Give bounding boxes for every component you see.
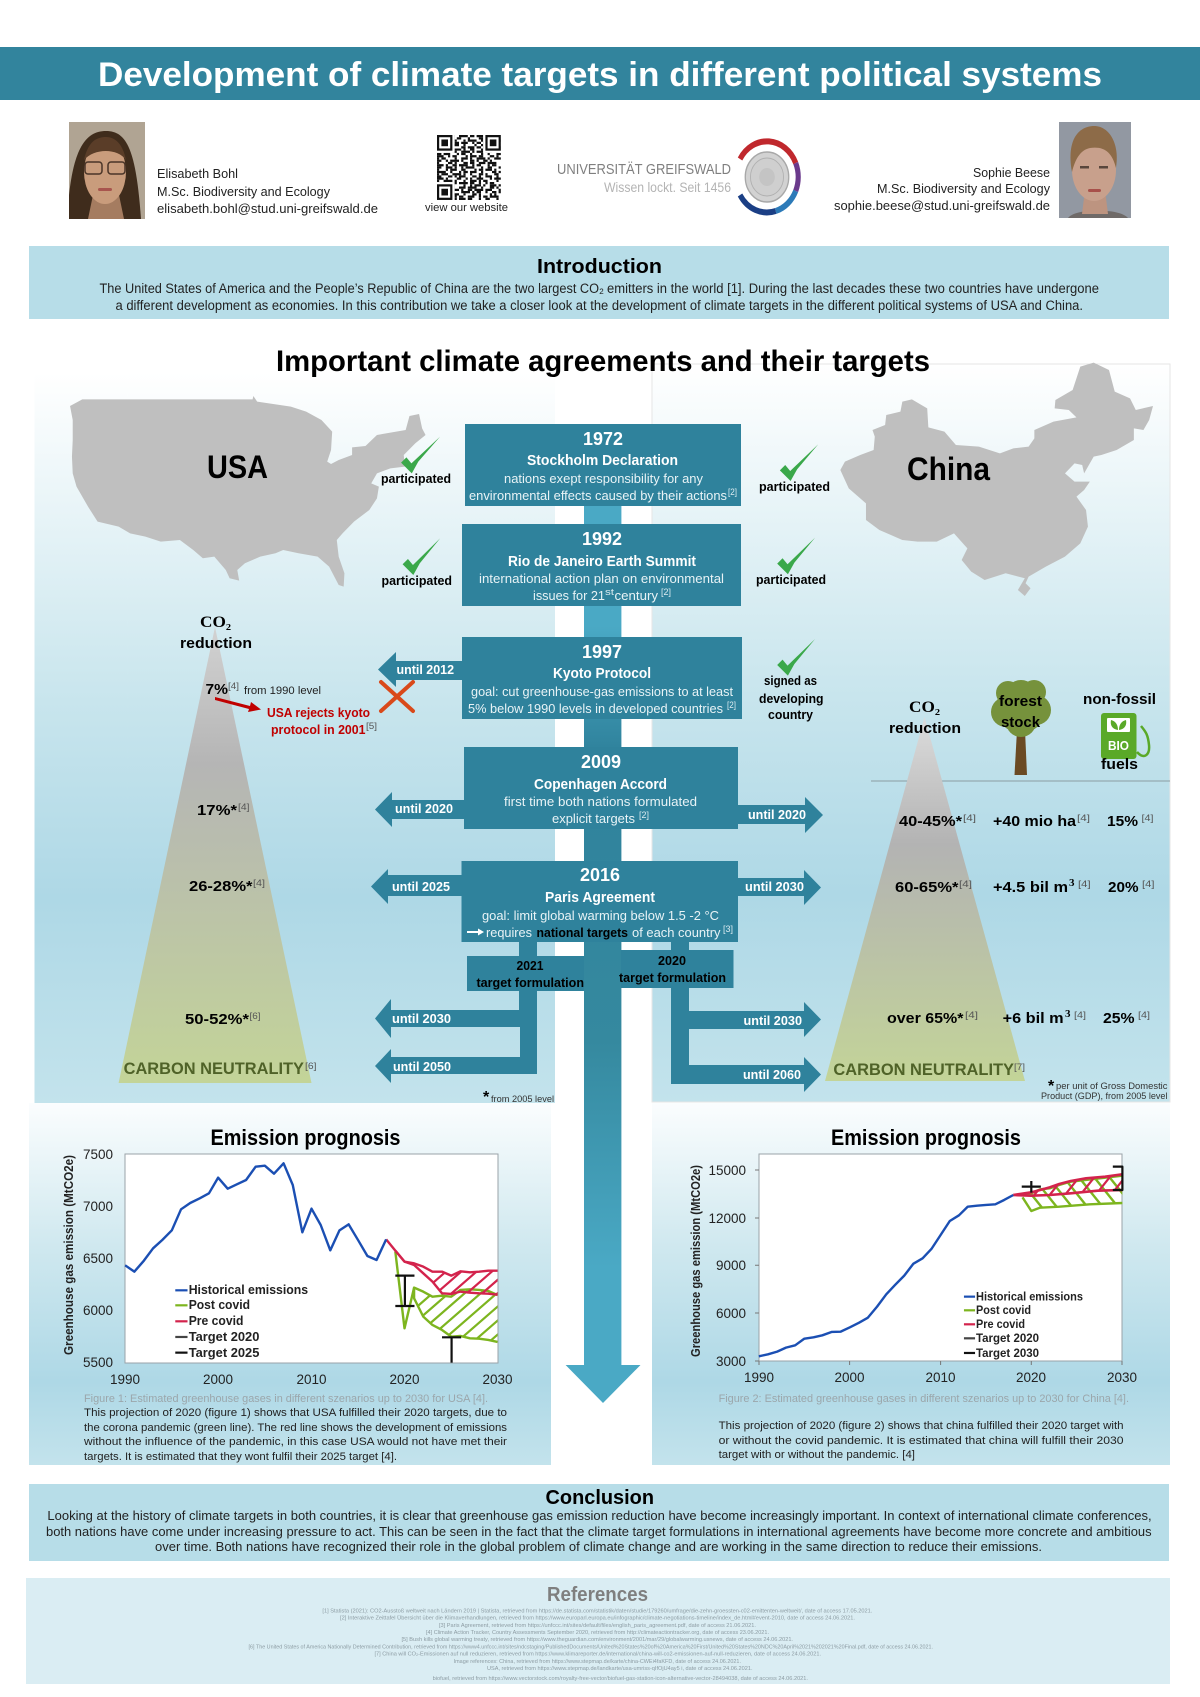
label: USA participated 1992: participated [382, 573, 452, 588]
legend labels: Pre covid [189, 1313, 243, 1328]
arrow: until 2012: until 2012 [396, 662, 454, 677]
heading: important climate agreements: Important climate agreements and their targets [276, 345, 930, 378]
text: USA figure caption: targets. It is estimated that they wont fulfil their 2025 target [4]. [84, 1451, 397, 1463]
label: USA carbon neutrality: [6] [305, 1061, 316, 1071]
legend labels: Target 2030 [976, 1346, 1039, 1360]
text: conclusion: over time. Both nations have recognized their role in the global problem of climate change and are working in the same direction to reduce their emissions. [155, 1539, 1042, 1554]
x axis labels [744, 1370, 1137, 1385]
legend labels: Historical emissions [976, 1290, 1083, 1304]
box: 2009 Copenhagen Accord: explicit targets [552, 812, 635, 826]
icon: check China 1972 [780, 444, 818, 481]
footnote: per unit of GDP [1041, 1078, 1168, 1102]
arrow: USA until 2025: until 2025 [392, 879, 450, 894]
label: China carbon neutrality: CARBON NEUTRALITY [833, 1060, 1015, 1079]
map: USA [70, 396, 426, 587]
text: conclusion: both nations have come under increasing pressure to act. This can be seen in the fact that the climate target formulations in international agreements have become more concrete and ambitious [46, 1524, 1152, 1539]
box: 1992 Rio de Janeiro Earth Summit: [2] [661, 587, 671, 597]
label: non-fossil: non-fossil [1083, 691, 1156, 708]
label: 2021 target formulation [476, 958, 584, 990]
arrow: China until 2030 [738, 870, 821, 905]
text: conclusion: Looking at the history of climate targets in both countries, it is clear that greenhouse gas emission reduction have become increasingly important. In context of international climate conferences, [47, 1508, 1152, 1523]
arrow: China until 2030: until 2030 [745, 879, 804, 894]
box: 1997 Kyoto Protocol: Kyoto Protocol [553, 665, 651, 682]
text: China figure caption: Figure 2: Estimated greenhouse gases in different szenarios up to 2030 for China [4]. [719, 1393, 1129, 1405]
university logo: Wissen lockt. Seit 1456 [604, 179, 731, 195]
box: 2009 Copenhagen Accord: 2009 [581, 752, 621, 772]
text: reference list: [6] The United States of America Nationally Determined Contribution, retrieved from https://www4.unfccc.int/sites/ndcstaging/PublishedDocuments/United%20States%20of%20America%20First/United%20States%20NDC%20April%2021%202021%20Final.pdf, date of access 24.06.2021. [248, 1644, 933, 1650]
text: reference list: Image references: China, retrieved from https://www.stepmap.de/karte/china-CWEi4faKFD, date of access 24.06.2021. [454, 1659, 741, 1665]
heading: USA CO2 reduction: reduction [180, 635, 252, 652]
row: forest and fuel 2020 [993, 813, 1154, 830]
box: 1972 Stockholm Declaration: environmental effects caused by their actions [469, 489, 727, 503]
map: China: China [907, 451, 990, 487]
text: China figure caption: This projection of 2020 (figure 2) shows that china fulfilled their 2020 target with [719, 1420, 1124, 1432]
legend labels [189, 1282, 308, 1360]
text: conclusion [46, 1508, 1152, 1554]
y axis labels: 7500 [83, 1147, 113, 1162]
label: signed as developing country [759, 673, 824, 722]
photo: Elisabeth Bohl [69, 122, 145, 219]
series: target 2025 [442, 1337, 461, 1363]
label: over 65 percent: over 65%* [887, 1010, 964, 1027]
label: USA until 2050: until 2050 [393, 1059, 451, 1074]
panel: conclusion [29, 1484, 1169, 1561]
pyramid: China CO2 reduction [825, 699, 1025, 1081]
text: reference list: [3] Paris Agreement, retrieved from https://unfccc.int/sites/default/files/english_paris_agreement.pdf, date of access 21.06.2021. [439, 1623, 756, 1629]
y axis labels: 12000 [708, 1211, 746, 1226]
box: 2009 Copenhagen Accord: Copenhagen Accord [534, 776, 667, 793]
panel: USA background [34, 373, 555, 1103]
box: 1992 Rio de Janeiro Earth Summit: century [614, 589, 659, 603]
x axis labels: 2020 [1016, 1370, 1046, 1385]
legend labels: Target 2020 [976, 1331, 1039, 1345]
text: reference list: biofuel, retrieved from https://www.vectorstock.com/royalty-free-vector/biofuel-gas-station-icon-alternative-vector-28494038, date of access 24.06.2021. [433, 1676, 808, 1682]
divider [871, 780, 1170, 782]
label: USA carbon neutrality: CARBON NEUTRALITY [124, 1059, 305, 1078]
legend labels [976, 1290, 1083, 1360]
label: 2020 target formulation: 2020 [658, 953, 686, 968]
icon: check China 1997 [777, 639, 815, 676]
row: forest and fuel 2030 [993, 877, 1154, 896]
university logo [557, 141, 798, 212]
box: 2016 Paris Agreement: requires [486, 926, 532, 940]
legend labels: Post covid [189, 1297, 250, 1312]
label: 26-28 percent: 26-28%* [189, 878, 253, 895]
label: signed as developing country: developing [759, 691, 824, 706]
text: reference list: [5] Bush kills global warming treaty, retrieved from https://www.theguardian.com/environment/2001/mar/29/globalwarming.usnews, date of access 24.06.2021. [402, 1637, 793, 1643]
box: 1997 Kyoto Protocol [462, 637, 742, 719]
panel: China background [652, 364, 1170, 1102]
footnote: per unit of GDP: per unit of Gross Domestic [1056, 1081, 1168, 1092]
y axis labels: 7000 [83, 1199, 113, 1214]
x axis labels: 1990 [110, 1372, 140, 1387]
label: 2020 target formulation: target formulation [619, 970, 726, 985]
text: reference list: [4] Climate Action Tracker, Country Assessments September 2020, retrieved from http://climateactiontracker.org, date of access 23.06.2021. [426, 1630, 769, 1636]
text: introduction: a different development as economies. In this contribution we take a closer look at the development of climate targets in the different political systems of USA and China. [116, 298, 1083, 313]
row: forest and fuel final: [4] [1138, 1010, 1150, 1020]
photo: Sophie Beese [1059, 122, 1131, 218]
footnote: from 2005 level [483, 1089, 554, 1106]
legend labels: Post covid [976, 1303, 1031, 1317]
university logo: UNIVERSITÄT GREIFSWALD [557, 161, 731, 178]
y axis title: Greenhouse gas emission (MtCO2e) [689, 1165, 703, 1357]
box: 2016 Paris Agreement: 2016 [580, 865, 620, 885]
map: USA: USA [207, 449, 268, 485]
author: Sophie Beese: sophie.beese@stud.uni-greifswald.de [834, 199, 1050, 213]
x axis labels: 2000 [834, 1370, 865, 1385]
row: forest and fuel 2030: 20% [1108, 879, 1138, 896]
series: historical [125, 1163, 386, 1272]
x axis labels: 2010 [925, 1370, 956, 1385]
icon: forest stock tree [991, 680, 1051, 775]
text: reference list: [7] China will CO₂-Emissionen auf null reduzieren, retrieved from https://www.klimareporter.de/international/china-will-co2-emissionen-auf-null-reduzieren, date of access 24.06.2021. [374, 1652, 821, 1658]
label: 60-65 percent: 60-65%* [895, 879, 959, 896]
box: 1997 Kyoto Protocol: [2] [727, 700, 736, 710]
row: forest and fuel 2020: 15% [1107, 813, 1138, 830]
label: 50-52 percent: 50-52%* [185, 1011, 249, 1028]
box: 2009 Copenhagen Accord: [2] [639, 810, 649, 820]
row: forest and fuel final: 25% [1103, 1010, 1135, 1027]
series: pre covid hatch [386, 1238, 498, 1296]
heading: references: References [547, 1584, 648, 1606]
series: pre covid hatch [1013, 1173, 1128, 1197]
author: Elisabeth Bohl: M.Sc. Biodiversity and Ecology [157, 185, 331, 199]
label: fuels: fuels [1101, 756, 1138, 773]
icon: check USA 1992 [403, 538, 440, 575]
chart: China emissions [689, 1154, 1137, 1385]
arrow: central timeline [566, 500, 640, 1403]
legend labels: Target 2020 [189, 1329, 259, 1344]
footnote: from 2005 level: from 2005 level [491, 1094, 554, 1105]
label: China participated 1992: participated [756, 572, 826, 587]
author: Sophie Beese: Sophie Beese [973, 166, 1050, 180]
y axis labels [83, 1147, 113, 1370]
label: 2021 target formulation: 2021 [516, 958, 544, 973]
label: 50-52 percent: [6] [250, 1011, 260, 1021]
box: 1972 Stockholm Declaration [465, 424, 741, 506]
label: USA rejects kyoto [267, 705, 377, 737]
box: 2016 Paris Agreement: [3] [723, 924, 733, 934]
text: USA figure caption: Figure 1: Estimated greenhouse gases in different szenarios up to 2030 for USA [4]. [84, 1393, 488, 1405]
box: 1992 Rio de Janeiro Earth Summit: issues for 21 [533, 589, 605, 603]
label: USA until 2030: until 2030 [392, 1011, 451, 1026]
label: USA rejects kyoto: [5] [366, 721, 377, 731]
label: 40-45 percent: 40-45%* [899, 813, 962, 830]
title banner [0, 47, 1200, 100]
x axis labels [110, 1372, 513, 1387]
label: China participated 1972: participated [759, 479, 830, 494]
y axis title: Greenhouse gas emission (MtCO2e) [62, 1155, 76, 1355]
text: reference list: USA, retrieved from https://www.stepmap.de/landkarte/usa-umriss-qIfOjU4ay5 i, date of access 24.06.2021. [487, 1666, 753, 1672]
box: 1997 Kyoto Protocol: 5% below 1990 levels in developed countries [468, 702, 723, 716]
box: 1997 Kyoto Protocol: goal: cut greenhouse-gas emissions to at least [471, 685, 734, 699]
heading: USA emission prognosis: Emission prognosis [210, 1125, 400, 1150]
arrow: red rejection [215, 697, 261, 712]
text: USA figure caption [83, 1393, 508, 1463]
label: forest stock: stock [1001, 714, 1041, 731]
panel: China emission prognosis background [652, 1103, 1170, 1465]
text: reference list [248, 1608, 933, 1682]
row: forest and fuel final: 3 [1065, 1008, 1071, 1020]
label: USA rejects kyoto: protocol in 2001 [271, 722, 366, 737]
label: 17 percent [197, 802, 250, 819]
text: China figure caption [719, 1393, 1129, 1461]
text: introduction: emitters in the world [1]. During the last decades these two countries have undergone [607, 281, 1099, 296]
label: forest stock [999, 693, 1042, 731]
legend labels: Target 2025 [189, 1345, 259, 1360]
box: China 2020 target formulation with arrows [619, 942, 821, 1092]
label: USA participated 1972: participated [381, 471, 451, 486]
label: 7 percent: [4] [228, 681, 239, 691]
series: historical [759, 1195, 1013, 1356]
label: 2020 target formulation [619, 953, 726, 985]
x axis labels: 2020 [389, 1372, 420, 1387]
row: forest and fuel 2030: +4.5 bil m [993, 879, 1068, 896]
row: forest and fuel 2020: [4] [1142, 813, 1154, 823]
series: post covid hatch [1022, 1176, 1122, 1212]
label: 7 percent: 7% [206, 681, 228, 698]
arrow: USA until 2025 [371, 869, 462, 904]
box: 1992 Rio de Janeiro Earth Summit: Rio de Janeiro Earth Summit [508, 553, 696, 570]
box: 2016 Paris Agreement: national targets [536, 926, 628, 940]
China participated marks [756, 444, 830, 722]
box: 1992 Rio de Janeiro Earth Summit: st [605, 587, 615, 597]
label: over 65 percent: [4] [965, 1010, 978, 1020]
x axis labels: 1990 [744, 1370, 774, 1385]
panel: USA emission prognosis background [29, 1103, 551, 1465]
row: forest and fuel final [1003, 1008, 1150, 1027]
QR caption: view our website [425, 202, 508, 214]
row: forest and fuel final: [4] [1074, 1010, 1086, 1020]
label: 7 percent [206, 681, 321, 698]
text: China figure caption: target with or without the pandemic. [4] [719, 1449, 915, 1461]
text: USA figure caption: the corona pandemic (green line). The red line shows the development of emissions [84, 1422, 508, 1434]
row: forest and fuel 2030: [4] [1078, 879, 1091, 889]
heading: China CO2 reduction [889, 699, 961, 737]
icon: red cross [381, 682, 413, 711]
y axis labels: 5500 [83, 1355, 113, 1370]
heading: USA CO2 reduction [180, 614, 252, 652]
row: forest and fuel 2030: [4] [1142, 879, 1154, 889]
box: 2016 Paris Agreement [462, 861, 738, 942]
arrow: until 2012 [378, 652, 462, 687]
map: China [840, 363, 1153, 596]
label: 26-28 percent: [4] [253, 878, 265, 888]
label: 7 percent: from 1990 level [244, 685, 321, 697]
series: post covid hatch [394, 1252, 498, 1344]
icon: biofuel pump: BIO [1108, 738, 1129, 753]
text: USA figure caption: This projection of 2020 (figure 1) shows that USA fulfilled their 2020 targets, due to [84, 1407, 507, 1419]
box: USA 2021 target formulation with arrows [375, 942, 584, 1083]
row: forest and fuel 2030: 3 [1069, 877, 1075, 889]
text: China figure caption: or without the covid pandemic. It is estimated that china will fulfill their 2030 [719, 1435, 1124, 1447]
box: 2016 Paris Agreement: Paris Agreement [545, 889, 655, 906]
arrow: China until 2020 [738, 797, 823, 833]
y axis labels: 15000 [708, 1163, 746, 1178]
y axis labels: 6000 [716, 1306, 746, 1321]
text: introduction [100, 281, 1099, 313]
box: 2009 Copenhagen Accord [464, 747, 738, 829]
text: reference list: [2] Interaktive Zeittafel Übersicht über die Klimaverhandlungen, retrieved from https://www.europarl.europa.eu/infographic/climate-negotiations-timeline/index_de.html#event-2010, date of access 24.06.2021. [340, 1614, 855, 1622]
icon: QR code [437, 135, 501, 200]
author: Sophie Beese [834, 166, 1051, 213]
heading: China CO2 reduction: CO₂ [909, 699, 940, 716]
box: 2016 Paris Agreement: of each country [632, 926, 721, 940]
heading: conclusion: Conclusion [546, 1486, 654, 1509]
icon: check USA 1972 [401, 437, 440, 473]
author: Elisabeth Bohl [157, 167, 378, 216]
legend labels: Historical emissions [189, 1282, 308, 1297]
row: forest and fuel 2020: [4] [1077, 813, 1090, 823]
text: introduction: The United States of America and the People’s Republic of China are the two largest CO₂ [100, 281, 604, 296]
x axis labels: 2030 [482, 1372, 513, 1387]
series: target 2030 [1113, 1167, 1122, 1190]
label: 17 percent: 17%* [197, 802, 237, 819]
label: China until 2060: until 2060 [743, 1067, 801, 1082]
legend labels: Pre covid [976, 1317, 1025, 1331]
label: 17 percent: [4] [238, 802, 250, 812]
label: China until 2030: until 2030 [744, 1013, 802, 1028]
box: 1972 Stockholm Declaration: [2] [728, 487, 737, 497]
box: 1992 Rio de Janeiro Earth Summit: international action plan on environmental [479, 572, 724, 586]
y axis labels: 6500 [83, 1251, 113, 1266]
box: 1992 Rio de Janeiro Earth Summit: 1992 [582, 529, 622, 549]
label: 60-65 percent: [4] [959, 879, 972, 889]
box: 2016 Paris Agreement: goal: limit global warming below 1.5 -2 °C [482, 909, 719, 923]
y axis labels: 6000 [83, 1303, 113, 1318]
box: 1992 Rio de Janeiro Earth Summit [462, 524, 741, 606]
text: reference list: [1] Statista (2021): CO2-Ausstoß weltweit nach Ländern 2019 | Statista, retrieved from https://de.statista.com/statistik/daten/studie/179260/umfrage/die-zehn-groessten-c02-emittenten-weltweit/, date of access 17.05.2021. [322, 1608, 873, 1614]
heading: USA CO2 reduction: CO₂ [200, 614, 231, 631]
legend lines [964, 1297, 975, 1353]
label: signed as developing country: signed as [764, 673, 817, 688]
label: forest stock: forest [999, 693, 1042, 710]
series: target 2020 [395, 1276, 414, 1306]
USA participated marks [381, 437, 452, 588]
panel: introduction [29, 246, 1169, 319]
y axis labels [708, 1163, 746, 1369]
series: target 2020 [1022, 1181, 1041, 1193]
pyramid: USA CO2 reduction [119, 614, 377, 1083]
label: USA rejects kyoto: USA rejects kyoto [267, 705, 370, 720]
y axis labels: 9000 [716, 1258, 746, 1273]
label: 2021 target formulation: target formulation [476, 975, 584, 990]
row: forest and fuel final: +6 bil m [1003, 1010, 1064, 1027]
box: 2009 Copenhagen Accord: first time both nations formulated [504, 795, 697, 809]
box: 1972 Stockholm Declaration: 1972 [583, 429, 623, 449]
footnote: per unit of GDP: Product (GDP), from 2005 level [1041, 1091, 1168, 1102]
author: Sophie Beese: M.Sc. Biodiversity and Ecology [877, 182, 1051, 196]
label: China carbon neutrality: [7] [1014, 1062, 1025, 1072]
y axis labels: 3000 [716, 1354, 746, 1369]
footnote: from 2005 level: * [483, 1089, 490, 1106]
box: 1972 Stockholm Declaration: Stockholm Declaration [527, 452, 678, 469]
icon: check China 1992 [777, 538, 815, 574]
footnote: per unit of GDP: * [1048, 1078, 1055, 1095]
arrow: USA until 2020 [375, 792, 464, 827]
box: 1972 Stockholm Declaration: nations exept responsibility for any [504, 472, 704, 486]
label: signed as developing country: country [768, 707, 814, 722]
text: USA figure caption: without the influence of the pandemic, in this case USA would not have met their [83, 1436, 507, 1448]
heading: China emission prognosis: Emission prognosis [831, 1125, 1021, 1150]
arrow: China until 2020: until 2020 [748, 807, 806, 822]
legend lines [175, 1290, 188, 1353]
panel: references [26, 1578, 1170, 1684]
x axis labels: 2000 [203, 1372, 233, 1387]
heading: introduction: Introduction [537, 255, 662, 278]
author: Elisabeth Bohl: Elisabeth Bohl [157, 167, 238, 181]
author: Elisabeth Bohl: elisabeth.bohl@stud.uni-greifswald.de [157, 202, 378, 216]
box: 1997 Kyoto Protocol: 1997 [582, 642, 622, 662]
heading: China CO2 reduction: reduction [889, 720, 961, 737]
chart: USA emissions [64, 1150, 512, 1384]
arrow: USA until 2020: until 2020 [395, 801, 453, 816]
icon: biofuel pump [1101, 713, 1149, 759]
row: forest and fuel 2020: +40 mio ha [993, 813, 1077, 830]
x axis labels: 2030 [1107, 1370, 1137, 1385]
title banner: Development of climate targets in different political systems [98, 56, 1102, 94]
label: 40-45 percent: [4] [963, 813, 976, 823]
x axis labels: 2010 [296, 1372, 327, 1387]
